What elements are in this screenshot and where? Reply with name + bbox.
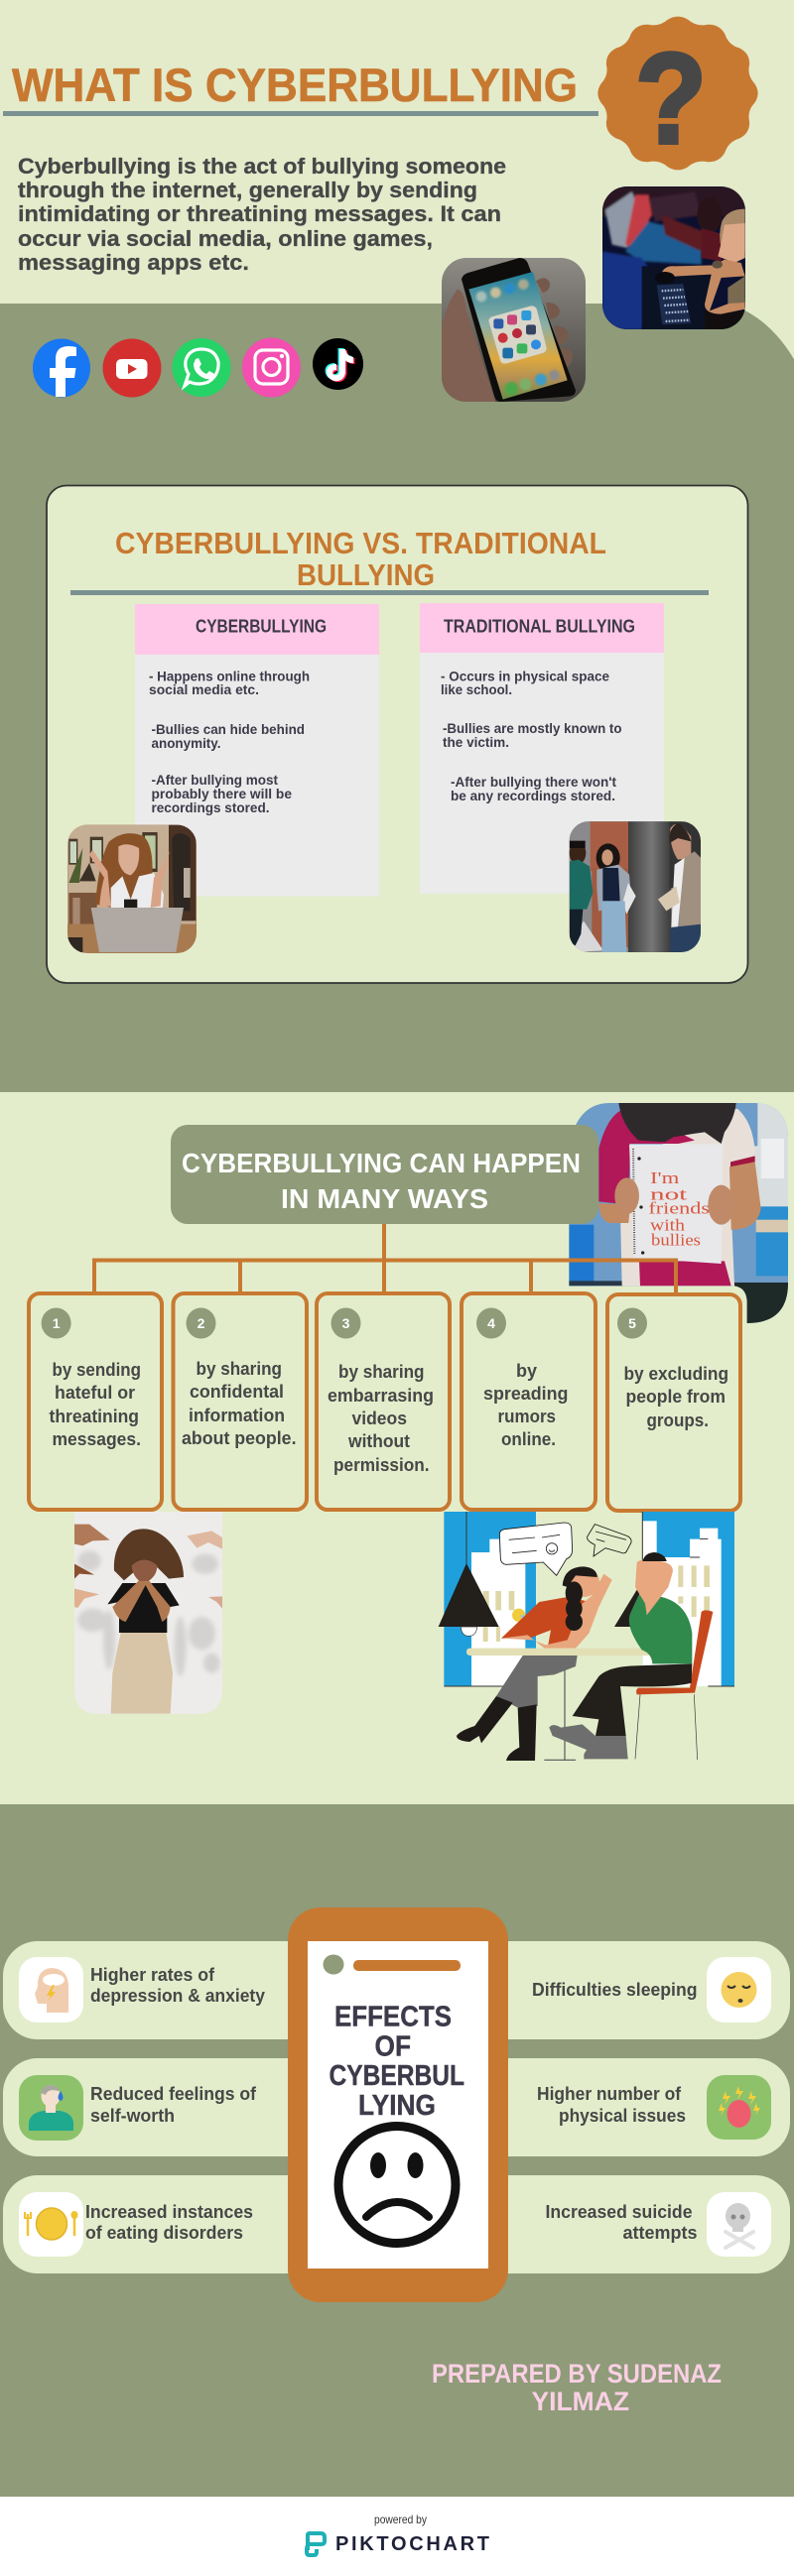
footer: white strip xyxy=(0,2497,794,2576)
heading: effects of cyberbullying: OF xyxy=(375,2031,411,2063)
text block: definition: intimidating or threatining messages. It can xyxy=(18,201,501,226)
column: cyberbullying: social media etc. xyxy=(149,682,259,697)
heading box: cyberbullying can happen in many ways xyxy=(171,1125,598,1224)
column: traditional bullying: the victim. xyxy=(443,735,509,750)
column: traditional bullying: like school. xyxy=(441,682,512,697)
column: cyberbullying: - Happens online through xyxy=(149,669,310,684)
heading box: cyberbullying can happen in many ways: CYBERBULLYING CAN HAPPEN xyxy=(182,1148,581,1178)
effect text: suicide: attempts xyxy=(623,2223,697,2243)
woman hair xyxy=(563,1566,597,1631)
effect text: depression: Higher rates of xyxy=(90,1965,215,1985)
chair legs xyxy=(635,1694,698,1760)
woman head xyxy=(569,1567,599,1597)
panel: cyberbullying vs traditional bullying xyxy=(47,486,748,983)
lamp bulb xyxy=(461,1627,477,1636)
handwritten notebook text: with xyxy=(650,1215,685,1234)
tree connector lines xyxy=(94,1224,676,1296)
effect text: physical issues: Higher number of xyxy=(537,2084,682,2104)
card 1: threatining xyxy=(50,1406,139,1426)
text block: definition: messaging apps etc. xyxy=(18,250,249,275)
speech bubble line marks xyxy=(509,1532,626,1553)
card 3: permission. xyxy=(333,1454,429,1475)
card 4: 4 xyxy=(487,1315,495,1331)
panel: ways section background xyxy=(0,1092,794,1804)
smiley in bubble xyxy=(546,1543,558,1554)
card 4 xyxy=(462,1293,596,1510)
column: cyberbullying: -After bullying most xyxy=(151,773,279,788)
credit: prepared by: PREPARED BY SUDENAZ xyxy=(432,2359,722,2389)
column: traditional bullying xyxy=(420,603,664,894)
icon: Instagram xyxy=(242,337,301,397)
column: cyberbullying: CYBERBULLYING xyxy=(196,617,327,637)
heading underline xyxy=(70,590,709,595)
icon: sad face xyxy=(338,2127,456,2244)
text block: definition: Cyberbullying is the act of bullying someone xyxy=(18,154,506,179)
footer: piktochart logo: PIKTOCHART xyxy=(335,2533,489,2555)
heading: comparison: CYBERBULLYING VS. TRADITIONAL xyxy=(115,526,606,560)
card 5 xyxy=(607,1294,740,1511)
man legs xyxy=(573,1663,692,1736)
photo: woman covering face with pointing hands xyxy=(74,1512,222,1714)
column: traditional bullying: -Bullies are mostly known to xyxy=(443,721,621,736)
photo: people gaming at computers xyxy=(602,186,745,329)
effect text: self-worth: self-worth xyxy=(90,2106,175,2126)
card 2: information xyxy=(189,1405,285,1425)
man shoes xyxy=(549,1724,628,1759)
icon: WhatsApp xyxy=(173,338,230,397)
card 1: 1 xyxy=(53,1315,61,1331)
icon: sleepy emoji xyxy=(707,1957,771,2023)
card 2: by sharing xyxy=(197,1358,282,1379)
man hair xyxy=(642,1552,667,1561)
heading: effects of cyberbullying xyxy=(330,2002,464,2122)
credit: prepared by: YILMAZ xyxy=(532,2387,629,2416)
corner fill behind curve xyxy=(729,304,794,359)
icon: Facebook xyxy=(33,339,90,397)
drink xyxy=(512,1609,537,1639)
effect text: physical issues xyxy=(537,2084,686,2126)
photo: girl holding notebook xyxy=(566,1099,794,1327)
icon: YouTube xyxy=(103,339,161,397)
heading box: cyberbullying can happen in many ways: IN MANY WAYS xyxy=(281,1183,488,1214)
man torso xyxy=(629,1595,692,1663)
text block: definition xyxy=(18,154,506,275)
column: traditional bullying: - Occurs in physical space xyxy=(441,669,609,684)
column: traditional bullying: -After bullying there won't xyxy=(451,775,616,790)
heading: effects of cyberbullying: EFFECTS xyxy=(334,2002,452,2033)
effect text: eating disorders xyxy=(85,2202,253,2243)
effect text: eating disorders: Increased instances xyxy=(85,2202,253,2222)
column: cyberbullying: probably there will be xyxy=(151,787,292,801)
panel: intro section background xyxy=(0,0,794,304)
card 3: embarrasing xyxy=(328,1385,434,1406)
heading: comparison: BULLYING xyxy=(297,557,435,592)
effect text: depression: depression & anxiety xyxy=(90,1986,265,2006)
icon: brain with lightning xyxy=(707,2075,771,2140)
effect text: suicide: Increased suicide xyxy=(546,2202,693,2222)
card 3 xyxy=(317,1293,450,1510)
woman torso xyxy=(501,1597,586,1649)
card 5: 5 xyxy=(628,1315,636,1331)
handwritten notebook text: I'm xyxy=(650,1168,680,1187)
speech bubble small xyxy=(588,1525,631,1556)
woman arm and face xyxy=(501,1574,612,1649)
left effect pills xyxy=(3,1941,360,2273)
card 2: confidental xyxy=(190,1381,284,1402)
card 4: online. xyxy=(501,1428,556,1449)
chair xyxy=(636,1610,713,1694)
card 5: groups. xyxy=(647,1410,709,1430)
panel: effects section background xyxy=(0,1804,794,2497)
card 1: hateful or xyxy=(55,1382,135,1403)
heading: effects of cyberbullying: LYING xyxy=(358,2090,436,2122)
lamp right xyxy=(614,1587,643,1627)
photo: hand holding smartphone xyxy=(442,258,586,404)
card 5: people from xyxy=(625,1386,726,1407)
icon: skull and crossbones xyxy=(707,2192,771,2257)
effect text: self-worth xyxy=(90,2084,257,2126)
icon: crying person xyxy=(19,2075,83,2141)
speech bubble with smiley xyxy=(499,1523,573,1575)
card 4: rumors xyxy=(498,1406,556,1426)
card 4: spreading xyxy=(483,1383,568,1404)
title: WHAT IS CYBERBULLYING xyxy=(12,59,578,111)
credit: prepared by xyxy=(432,2359,722,2416)
effect text: suicide xyxy=(546,2202,697,2243)
lamp left xyxy=(439,1563,499,1627)
icon: question mark badge xyxy=(597,17,758,171)
effect text: depression xyxy=(90,1965,265,2006)
handwritten notebook text: not xyxy=(650,1185,688,1204)
column: cyberbullying: anonymity. xyxy=(151,736,220,751)
card 3: without xyxy=(347,1430,410,1451)
card 5: by excluding xyxy=(623,1363,728,1384)
table xyxy=(466,1649,652,1656)
effect text: self-worth: Reduced feelings of xyxy=(90,2084,257,2104)
right effect pills xyxy=(437,1941,790,2273)
card 1 xyxy=(29,1293,162,1510)
illustration: two people gossiping at a cafe table xyxy=(439,1512,734,1761)
social media icons xyxy=(33,337,363,397)
woman legs xyxy=(496,1656,578,1708)
column: traditional bullying: be any recordings stored. xyxy=(451,789,615,803)
icon: plate and cutlery xyxy=(19,2192,83,2257)
card 3: 3 xyxy=(342,1315,350,1331)
icon: head with storm cloud xyxy=(19,1957,83,2023)
card 3: videos xyxy=(351,1408,407,1428)
card 1: by sending xyxy=(52,1359,141,1380)
card 3: by sharing xyxy=(338,1361,425,1382)
icon: TikTok xyxy=(313,338,363,390)
title underline xyxy=(3,111,598,116)
effect text: physical issues: physical issues xyxy=(559,2106,686,2126)
column: cyberbullying xyxy=(135,604,379,897)
icon: question mark badge: ? xyxy=(635,26,707,171)
column: cyberbullying: recordings stored. xyxy=(151,800,270,815)
card 2: 2 xyxy=(198,1315,205,1331)
text block: definition: through the internet, generally by sending xyxy=(18,178,477,202)
card 1: messages. xyxy=(52,1428,141,1449)
photo: frustrated woman at laptop xyxy=(67,824,197,953)
column: traditional bullying: TRADITIONAL BULLYING xyxy=(444,617,635,637)
card 2 xyxy=(173,1293,307,1510)
photo: group of students walking xyxy=(569,821,702,952)
column: cyberbullying: -Bullies can hide behind xyxy=(151,722,305,737)
illustration: phone with effects heading xyxy=(288,1907,508,2302)
card 2: about people. xyxy=(182,1427,296,1448)
heading: comparison xyxy=(115,526,606,592)
effect text: eating disorders: of eating disorders xyxy=(85,2223,243,2243)
text block: definition: occur via social media, online games, xyxy=(18,226,433,251)
effect text: sleeping: Difficulties sleeping xyxy=(532,1980,697,2000)
handwritten notebook text: friends xyxy=(648,1198,710,1217)
handwritten notebook text: bullies xyxy=(651,1231,701,1250)
card 4: by xyxy=(516,1360,538,1381)
footer: powered by text: powered by xyxy=(374,2513,427,2526)
man head and hand xyxy=(635,1559,673,1615)
handwritten notebook text xyxy=(649,1172,709,1246)
woman boots xyxy=(457,1696,537,1761)
panel: olive section with curved corner xyxy=(0,304,794,1092)
heading: effects of cyberbullying: CYBERBUL xyxy=(330,2060,464,2092)
